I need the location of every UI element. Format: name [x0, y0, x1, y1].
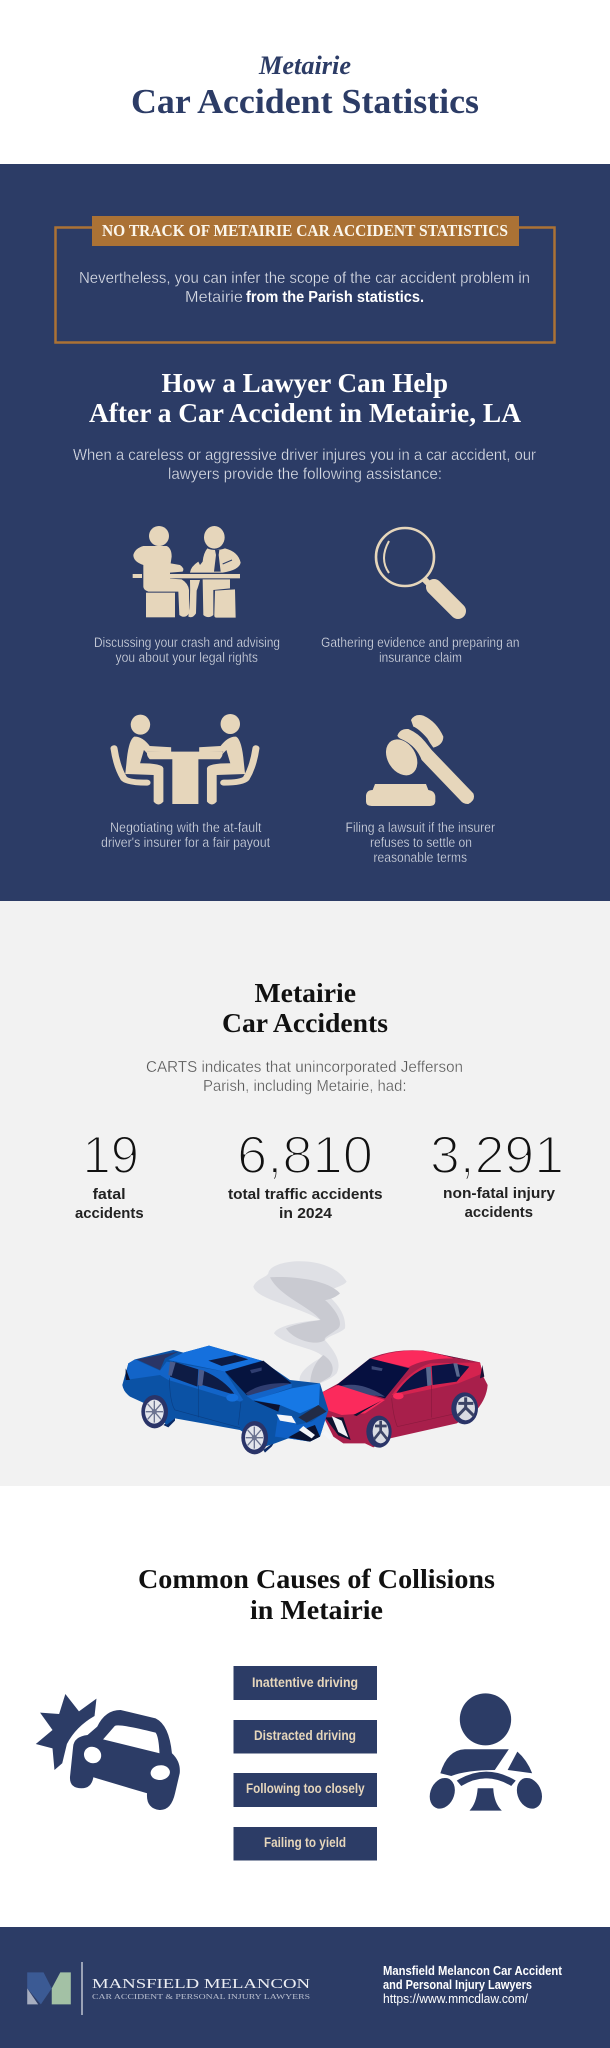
caption: negotiating with insurer: Negotiating with the at-fault — [110, 820, 262, 835]
cause: distracted driving — [234, 1720, 377, 1754]
heading: Metairie Car Accidents — [222, 978, 388, 1038]
heading: Metairie Car Accidents: Metairie — [254, 978, 356, 1008]
icon: car crash — [36, 1694, 180, 1810]
panel: Metairie car accidents — [0, 901, 610, 1486]
stat: 19 fatal accidents: accidents — [75, 1206, 144, 1222]
intro text: When a careless or aggressive driver injures you in a car accident, our — [73, 447, 537, 464]
smoke — [253, 1261, 347, 1387]
callout box: no track of statistics — [56, 216, 554, 342]
stat: 6,810 total traffic accidents — [228, 1126, 382, 1222]
icon: driver at steering wheel — [426, 1693, 546, 1811]
stat: 6,810 total traffic accidents: in 2024 — [279, 1206, 332, 1222]
caption: negotiating with insurer — [101, 820, 270, 850]
stat: 6,810 total traffic accidents: total traffic accidents — [228, 1187, 382, 1203]
logo wordmark: MANSFIELD MELANCON — [92, 1977, 310, 1992]
callout text: from the Parish statistics. — [246, 289, 424, 306]
caption: discussing your crash — [94, 635, 280, 665]
panel: footer — [0, 1927, 610, 2048]
heading: how a lawyer can help: How a Lawyer Can Help — [162, 368, 448, 398]
stat: 3,291 non-fatal injury accidents: non-fatal injury — [443, 1186, 555, 1202]
logo wordmark: CAR ACCIDENT & PERSONAL INJURY LAWYERS — [92, 1993, 310, 2001]
footer contact text — [383, 1964, 563, 2006]
stat: 3,291 non-fatal injury accidents: 3,291 — [430, 1126, 564, 1185]
red car — [320, 1350, 488, 1448]
callout banner — [92, 216, 519, 246]
illustration: two cars in head-on crash with smoke — [122, 1261, 488, 1454]
stat: 3,291 non-fatal injury accidents — [430, 1126, 564, 1221]
icon: gavel — [366, 715, 474, 806]
title: Car Accident Statistics: Car Accident Statistics — [131, 82, 479, 121]
heading: Metairie Car Accidents: Car Accidents — [222, 1008, 388, 1038]
logo: Mansfield Melancon — [27, 1962, 310, 2015]
caption: discussing your crash: Discussing your crash and advising — [94, 635, 280, 650]
cause: failing to yield: Failing to yield — [264, 1835, 346, 1850]
callout text — [79, 270, 530, 306]
caption: discussing your crash: you about your legal rights — [116, 650, 258, 665]
caption: gathering evidence: insurance claim — [379, 650, 462, 665]
footer contact text: https://www.mmcdlaw.com/ — [383, 1992, 528, 2006]
blue truck wheels — [141, 1395, 268, 1454]
intro text: lawyers provide the following assistance: — [168, 466, 442, 483]
caption: filing a lawsuit: Filing a lawsuit if the insurer — [346, 820, 495, 835]
panel: how a lawyer can help — [0, 164, 610, 901]
icon: magnifying glass — [376, 528, 458, 611]
stat: 19 fatal accidents — [75, 1126, 144, 1222]
footer contact text: Mansfield Melancon Car Accident — [383, 1964, 563, 1978]
blue pickup truck — [122, 1346, 334, 1454]
red car wheels — [366, 1392, 478, 1448]
intro text: CARTS: Parish, including Metairie, had: — [203, 1078, 406, 1095]
caption: filing a lawsuit — [346, 820, 495, 865]
heading: common causes: in Metairie — [250, 1595, 383, 1625]
panel: title header — [0, 0, 610, 164]
cause: following too closely — [234, 1773, 377, 1807]
stat: 19 fatal accidents: 19 — [82, 1126, 139, 1185]
title: Metairie: Metairie — [258, 51, 351, 80]
cause: distracted driving: Distracted driving — [254, 1728, 356, 1743]
cause list — [234, 1666, 377, 1860]
icon: negotiating at table — [114, 714, 256, 804]
caption: filing a lawsuit: refuses to settle on — [370, 835, 472, 850]
caption: gathering evidence — [321, 635, 520, 665]
cause: inattentive driving — [234, 1666, 377, 1700]
intro text: CARTS: CARTS indicates that unincorporated Jefferson — [146, 1059, 463, 1076]
intro text — [73, 447, 537, 483]
callout text: Nevertheless, you can infer the scope of the car accident problem in — [79, 270, 530, 287]
cause: following too closely: Following too closely — [246, 1781, 365, 1796]
intro text: CARTS — [146, 1059, 463, 1095]
cause: failing to yield — [234, 1827, 377, 1860]
caption: gathering evidence: Gathering evidence and preparing an — [321, 635, 520, 650]
heading: how a lawyer can help: After a Car Accident in Metairie, LA — [89, 398, 521, 428]
heading: how a lawyer can help — [89, 368, 521, 428]
stat: 3,291 non-fatal injury accidents: accidents — [465, 1205, 533, 1221]
logo wordmark — [92, 1977, 310, 2001]
stat: 19 fatal accidents: fatal — [93, 1187, 126, 1203]
heading: common causes: Common Causes of Collisions — [138, 1564, 495, 1594]
heading: common causes — [138, 1564, 495, 1625]
stat: 6,810 total traffic accidents: 6,810 — [237, 1126, 373, 1185]
footer contact text: and Personal Injury Lawyers — [383, 1978, 532, 1992]
caption: filing a lawsuit: reasonable terms — [374, 850, 467, 865]
panel: common causes of collisions — [0, 1486, 610, 1927]
icon: lawyer consultation at desk — [133, 526, 241, 618]
cause: inattentive driving: Inattentive driving — [252, 1675, 358, 1690]
callout banner: NO TRACK OF METAIRIE CAR ACCIDENT STATISTICS — [102, 221, 508, 240]
logo mark: M — [27, 1972, 71, 2004]
caption: negotiating with insurer: driver's insurer for a fair payout — [101, 835, 270, 850]
callout text: Metairie — [185, 289, 243, 306]
